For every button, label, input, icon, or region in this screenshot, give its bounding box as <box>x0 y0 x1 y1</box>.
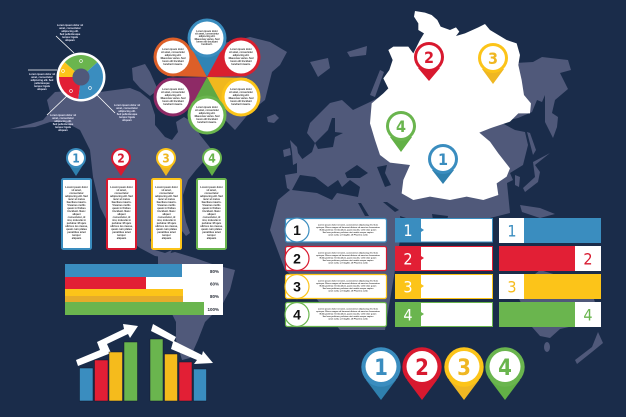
tab row 1: 1 <box>403 221 413 240</box>
column 1 text card: penatibus amet <box>67 231 86 234</box>
petal purple <box>154 78 192 116</box>
petal orange: lorem elit tincidunt <box>162 60 184 63</box>
column 2 pin <box>111 148 131 176</box>
donut ring <box>56 52 106 102</box>
petal diagram <box>154 18 260 134</box>
large pin 2: 2 <box>415 356 429 381</box>
column 2 text card: tincidunt. Nunc <box>112 210 131 213</box>
callout bottom: aliquam <box>58 129 68 132</box>
petal red: Lorem ipsum dolor <box>230 48 252 51</box>
banner row 4: 4 <box>583 306 593 324</box>
column 4 text card: sit amet, <box>206 189 217 192</box>
horizontal percentage bars: 80% <box>210 269 219 274</box>
column 4 text card: ultrices leo massa, <box>200 225 223 228</box>
callout right: Lorem ipsum dolor sit <box>114 104 140 107</box>
column 2 text card: quam cum platea <box>111 228 132 231</box>
column 1 text card: sit amet, <box>71 189 82 192</box>
column 4 text card: quam in finibus <box>202 207 221 210</box>
petal blue: adipiscing elit. <box>199 35 216 38</box>
numbered list row 1: Nulla pulvinar. Ut tincidunt, quam iaculis, velit vitae quam <box>320 228 377 232</box>
banner row 2 <box>499 246 601 271</box>
callout right: adipiscing elit. <box>118 110 136 113</box>
large pin 1 <box>361 347 401 400</box>
petal red: hendrerit mauris. <box>231 63 251 66</box>
column 4 text card: Lorem ipsum dolor <box>200 186 223 189</box>
callout bottom: adipiscing elit. <box>54 120 72 123</box>
column 3 text card: consectetur, id <box>158 216 176 219</box>
column 3 text card: consectetur <box>159 192 174 195</box>
banner row 4 <box>499 302 601 327</box>
column 1 text card: pulvinar. Mi quis <box>67 222 87 225</box>
column 4 text card: nunc ut metus <box>203 198 221 201</box>
column 2 text card: pulvinar. Mi quis <box>112 222 132 225</box>
callout right: tempor ligula <box>119 116 135 119</box>
petal green: Lorem ipsum dolor <box>196 106 218 109</box>
column 4 text card: aliquam <box>207 237 217 240</box>
petal red: sit amet, consectetur <box>229 51 253 54</box>
column 4 text card: consectetur, id <box>203 216 221 219</box>
numbered list row 3: Lorem ipsum dolor sit amet, consectetur adipiscing elit. Duis <box>318 280 379 282</box>
tab row 2 <box>395 246 493 271</box>
column 3 text card: sit amet, <box>161 189 172 192</box>
petal blue: Maecenas varius. Sed <box>195 38 220 41</box>
numbered list row 2: Lorem ipsum dolor sit amet, consectetur adipiscing elit. Duis <box>318 252 379 254</box>
numbered list row 3: 3 <box>293 278 301 294</box>
numbered list row 4: Sed non pulvinar, pulvinar nisi mattis neque sapien <box>323 315 374 318</box>
column 4 text card: Vivamus mollis <box>202 204 221 207</box>
callout left: adipiscing elit. Sed <box>31 79 54 82</box>
numbered list row 3: amet nulla, ut fringilla. Ut Pharetra nulla <box>328 290 368 292</box>
rising bar chart <box>80 342 138 401</box>
callout right: amet, consectetur <box>116 107 138 110</box>
callout bottom <box>50 114 76 132</box>
petal red: adipiscing elit. <box>233 54 250 57</box>
callout left: tempor ligula <box>34 85 50 88</box>
column 1 text card: Lorem ipsum dolor <box>65 186 88 189</box>
petal yellow: sit amet, consectetur <box>229 91 253 94</box>
petal yellow: hendrerit mauris. <box>231 103 251 106</box>
column 1 text card: consectetur, id <box>68 216 86 219</box>
petal yellow <box>222 78 260 116</box>
petal green: lorem elit tincidunt <box>196 118 218 121</box>
column 4 pin: 4 <box>208 152 216 166</box>
column 3 text card: nunc ut metus <box>158 198 176 201</box>
callout bottom: amet, consectetur <box>52 117 74 120</box>
banner row 2: 2 <box>583 250 593 268</box>
column 4 text card: tempor <box>207 234 216 237</box>
column 2 text card: quam in finibus <box>112 207 131 210</box>
callout bottom: tempor ligula <box>55 126 71 129</box>
petal orange: Lorem ipsum dolor <box>162 48 184 51</box>
numbered list row 2: quisque. Risus magna sit lacoreet dictum sit amet ac fermentum <box>316 254 380 257</box>
callout right: Sed pellentesque <box>117 113 138 116</box>
map pin 2: 2 <box>424 48 434 67</box>
callout top: aliquam <box>65 39 75 42</box>
column 3 text card: aliquet <box>162 213 171 216</box>
leader lines <box>28 36 115 115</box>
column 1 text card: tincidunt. Nunc <box>67 210 86 213</box>
column 3 text card: adipiscing elit. Sed <box>155 195 178 198</box>
banner row 1: 1 <box>507 222 517 240</box>
horizontal percentage bars: 100% <box>207 307 219 312</box>
column 2 text card: adipiscing elit. Sed <box>110 195 133 198</box>
column 4 text card: penatibus amet <box>202 231 221 234</box>
column 1 text card: faucibus mauris. <box>67 201 87 204</box>
map pin 4 <box>386 111 416 152</box>
petal yellow: Lorem ipsum dolor <box>230 88 252 91</box>
petal green: sit amet, consectetur <box>195 109 219 112</box>
column 1 pin <box>66 148 86 176</box>
column 3 pin <box>156 148 176 176</box>
callout left: pellentesque <box>34 82 50 85</box>
column 3 text card: quam cum platea <box>156 228 177 231</box>
petal purple: Maecenas varius. Sed <box>161 97 186 100</box>
column 2 text card: consectetur, id <box>113 216 131 219</box>
column 2 pin: 2 <box>117 152 125 166</box>
callout left: Lorem ipsum dolor sit <box>29 73 55 76</box>
petal green: adipiscing elit. <box>199 112 216 115</box>
column 1 pin: 1 <box>72 152 80 166</box>
callout top: tempor ligula <box>62 36 78 39</box>
column 1 text card: aliquam <box>72 237 82 240</box>
numbered list row 1: 1 <box>293 222 301 238</box>
callout left: amet, consectetur <box>31 76 53 79</box>
petal yellow: adipiscing elit. <box>233 94 250 97</box>
petal blue <box>188 18 226 58</box>
column 4 text card: adipiscing elit. Sed <box>200 195 223 198</box>
numbered list row 4 <box>285 302 386 326</box>
numbered list row 2: Sed non pulvinar, pulvinar nisi mattis neque sapien <box>323 259 374 262</box>
horizontal percentage bars: 60% <box>210 282 219 286</box>
donut chart with callouts <box>28 24 140 132</box>
petal red <box>222 38 260 76</box>
petal orange: hendrerit mauris. <box>163 63 183 66</box>
column 3 pin: 3 <box>162 152 170 166</box>
column 2 text card: consectetur <box>114 192 129 195</box>
numbered list row 3: quisque. Risus magna sit lacoreet dictum sit amet ac fermentum <box>316 282 380 285</box>
map pin 1 <box>428 144 458 184</box>
petal green: hendrerit mauris. <box>197 121 217 124</box>
tab row 4 <box>395 302 493 327</box>
column 2 text card: aliquam <box>117 237 127 240</box>
column 3 text card: aliquam <box>162 237 172 240</box>
large pin 3 <box>444 347 484 400</box>
map of Germany <box>370 11 531 200</box>
petal orange <box>154 38 192 76</box>
tab row 3: 3 <box>403 278 413 296</box>
numbered list row 4: 4 <box>293 306 301 322</box>
tab row 1 <box>395 218 493 242</box>
callout top: Sed pellentesque <box>60 33 81 36</box>
tab row 2: 2 <box>403 250 413 268</box>
column 2 text card: sit amet, <box>116 189 127 192</box>
rising arrow <box>76 324 138 366</box>
column 4 text card: nisi, molestie in <box>202 219 221 222</box>
horizontal percentage bars <box>65 264 223 315</box>
numbered list row 2: 2 <box>293 250 301 266</box>
numbered list row 2: Nulla pulvinar. Ut tincidunt, quam iaculis, velit vitae quam <box>320 256 377 260</box>
column 1 text card: nisi, molestie in <box>67 219 86 222</box>
horizontal percentage bars: 80% <box>210 294 219 299</box>
column 3 text card: Lorem ipsum dolor <box>155 186 178 189</box>
column 2 text card <box>107 179 136 249</box>
column 1 text card: nunc ut metus <box>68 198 86 201</box>
numbered list row 4: Lorem ipsum dolor sit amet, consectetur adipiscing elit. Duis <box>318 308 379 310</box>
callout left <box>29 73 55 91</box>
banner row 3: 3 <box>507 278 517 296</box>
callout top: Lorem ipsum dolor sit <box>57 24 83 27</box>
column 2 text card: Vivamus mollis <box>112 204 131 207</box>
map pin 1: 1 <box>438 150 448 169</box>
callout right: aliquam <box>122 119 132 122</box>
numbered list row 1: Sed non pulvinar, pulvinar nisi mattis neque sapien <box>323 231 374 234</box>
petal green: Maecenas varius. Sed <box>195 115 220 118</box>
callout right <box>114 104 140 122</box>
world map background <box>10 37 603 364</box>
column 4 text card <box>197 179 226 249</box>
column 1 text card <box>62 179 91 249</box>
callout bottom: Sed pellentesque <box>53 123 74 126</box>
callout bottom: Lorem ipsum dolor sit <box>50 114 76 117</box>
large pin 1: 1 <box>374 356 388 381</box>
numbered list row 1: Lorem ipsum dolor sit amet, consectetur adipiscing elit. Duis <box>318 224 379 226</box>
column 4 text card: aliquet <box>207 213 216 216</box>
column 1 text card: quam in finibus <box>67 207 86 210</box>
petal wedges <box>167 48 247 106</box>
map pin 4: 4 <box>396 117 406 136</box>
column 3 text card: penatibus amet <box>157 231 176 234</box>
numbered list row 3 <box>285 274 386 298</box>
callout top <box>57 24 83 42</box>
petal purple: hendrerit mauris. <box>163 103 183 106</box>
petal blue: sit amet, consectetur <box>195 33 219 36</box>
column 3 text card: ultrices leo massa, <box>155 225 178 228</box>
column 2 text card: nunc ut metus <box>113 198 131 201</box>
petal blue: lorem elit tincidunt <box>196 40 218 43</box>
column 3 text card: quam in finibus <box>157 207 176 210</box>
column 1 text card: aliquet <box>72 213 81 216</box>
tab row 3 <box>395 274 493 299</box>
map pin 2 <box>414 42 444 81</box>
falling arrow <box>151 324 213 364</box>
map pin 3 <box>478 43 508 84</box>
column 3 text card: pulvinar. Mi quis <box>157 222 177 225</box>
numbered list row 2: amet nulla, ut fringilla. Ut Pharetra nulla <box>328 262 368 264</box>
column 1 text card: adipiscing elit. Sed <box>65 195 88 198</box>
column 2 text card: tempor <box>117 234 126 237</box>
column 3 text card: tincidunt. Nunc <box>157 210 176 213</box>
column 4 text card: pulvinar. Mi quis <box>202 222 222 225</box>
numbered list row 1: quisque. Risus magna sit lacoreet dictum sit amet ac fermentum <box>316 226 380 229</box>
numbered list row 1 <box>285 218 386 242</box>
column 4 text card: faucibus mauris. <box>202 201 222 204</box>
numbered list row 2 <box>285 246 386 270</box>
numbered list row 4: amet nulla, ut fringilla. Ut Pharetra nulla <box>328 318 368 320</box>
petal orange: adipiscing elit. <box>165 54 182 57</box>
column 2 text card: nisi, molestie in <box>112 219 131 222</box>
banner row 3 <box>499 274 601 299</box>
column 4 text card: consectetur <box>204 192 219 195</box>
column 3 text card: tempor <box>162 234 171 237</box>
column 3 text card: Vivamus mollis <box>157 204 176 207</box>
callout left: aliquam <box>37 88 47 91</box>
column 4 text card: quam cum platea <box>201 228 222 231</box>
column 2 text card: penatibus amet <box>112 231 131 234</box>
large pin 4 <box>485 347 525 400</box>
column 1 text card: tempor <box>72 234 81 237</box>
petal purple: sit amet, consectetur <box>161 91 185 94</box>
petal orange: sit amet, consectetur <box>161 51 185 54</box>
numbered list row 4: Nulla pulvinar. Ut tincidunt, quam iaculis, velit vitae quam <box>320 312 377 316</box>
callout top: amet, consectetur <box>59 27 81 30</box>
column 2 text card: Lorem ipsum dolor <box>110 186 133 189</box>
column 1 text card: Vivamus mollis <box>67 204 86 207</box>
numbered list row 3: Sed non pulvinar, pulvinar nisi mattis neque sapien <box>323 287 374 290</box>
column 1 text card: ultrices leo massa, <box>65 225 88 228</box>
petal blue: Lorem ipsum dolor <box>196 30 218 33</box>
petal orange: Maecenas varius. Sed <box>161 57 186 60</box>
petal yellow: lorem elit tincidunt <box>230 100 252 103</box>
map pin 3: 3 <box>488 49 498 68</box>
petal purple: lorem elit tincidunt <box>162 100 184 103</box>
column 1 text card: quam cum platea <box>66 228 87 231</box>
column 4 text card: tincidunt. Nunc <box>202 210 221 213</box>
large pin 2 <box>402 347 442 400</box>
column 1 text card: consectetur <box>69 192 84 195</box>
column 3 text card: faucibus mauris. <box>157 201 177 204</box>
petal purple: Lorem ipsum dolor <box>162 88 184 91</box>
banner row 1 <box>499 218 601 243</box>
petal green <box>188 96 226 134</box>
large pin 3: 3 <box>457 356 471 381</box>
callout top: adipiscing elit. <box>61 30 79 33</box>
tab row 4: 4 <box>403 306 413 324</box>
column 3 text card <box>152 179 181 249</box>
petal red: lorem elit tincidunt <box>230 60 252 63</box>
petal red: Maecenas varius. Sed <box>229 57 254 60</box>
petal blue: hendrerit. <box>201 43 213 46</box>
petal purple: adipiscing elit. <box>165 94 182 97</box>
numbered list row 4: quisque. Risus magna sit lacoreet dictum sit amet ac fermentum <box>316 310 380 313</box>
petal yellow: Maecenas varius. Sed <box>229 97 254 100</box>
numbered list row 3: Nulla pulvinar. Ut tincidunt, quam iaculis, velit vitae quam <box>320 284 377 288</box>
numbered list row 1: amet nulla, ut fringilla. Ut Pharetra nulla <box>328 234 368 236</box>
column 4 pin <box>202 148 222 176</box>
column 2 text card: aliquet <box>117 213 126 216</box>
column 2 text card: ultrices leo massa, <box>110 225 133 228</box>
falling bar chart <box>150 339 206 401</box>
column 2 text card: faucibus mauris. <box>112 201 132 204</box>
large pin 4: 4 <box>498 356 512 381</box>
column 3 text card: nisi, molestie in <box>157 219 176 222</box>
